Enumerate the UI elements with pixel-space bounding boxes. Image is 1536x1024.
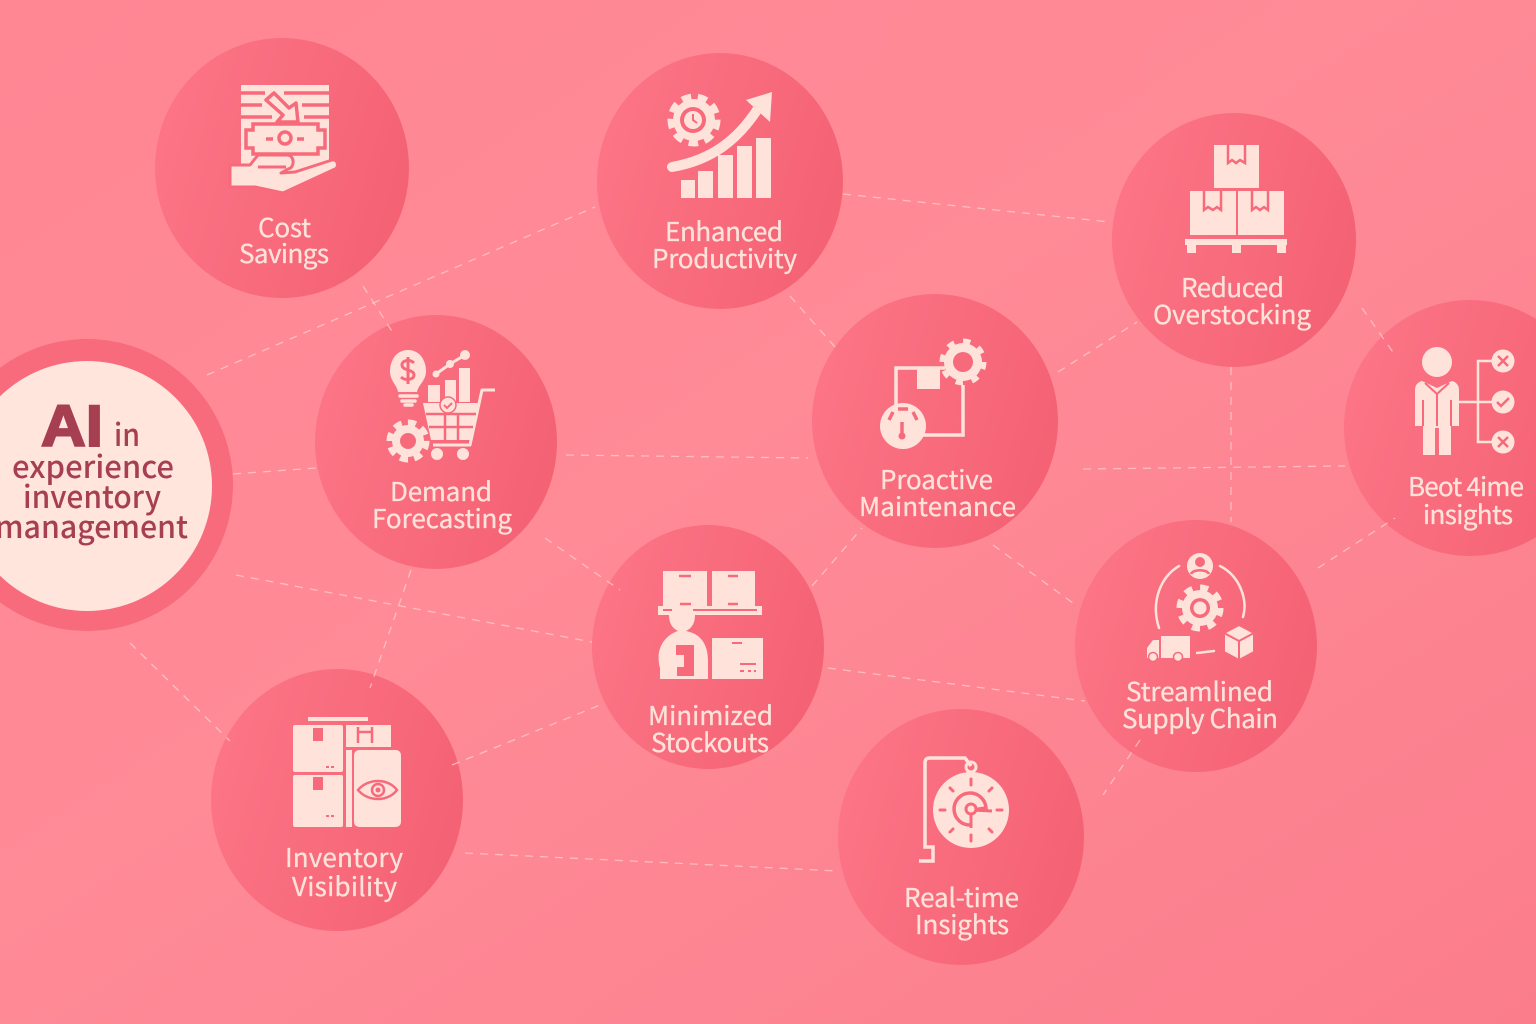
label: Insights <box>915 905 1009 942</box>
panel: cost savings <box>155 38 409 298</box>
central hub: AI in experience inventory management: experience <box>12 442 174 487</box>
icon: bulb, chart, cart and gear <box>390 350 495 460</box>
icon: gear, growth arrow and bars <box>672 92 772 198</box>
label: Cost <box>258 208 311 245</box>
icon: stacked boxes on pallet <box>1185 145 1287 253</box>
label: Minimized <box>648 696 773 733</box>
icon: gauge, box and gear flow <box>880 342 983 449</box>
central hub: AI in experience inventory management: management <box>0 502 188 547</box>
label <box>239 208 329 271</box>
central hub: AI in experience inventory management: in <box>114 410 140 455</box>
panel: best-time insights (garbled "Beot 4ime") <box>1344 300 1536 556</box>
label <box>1122 672 1278 736</box>
label <box>652 212 797 276</box>
panel: enhanced productivity <box>597 53 843 309</box>
label <box>285 838 403 904</box>
label <box>859 460 1016 524</box>
label: Forecasting <box>372 499 512 536</box>
label: insights <box>1423 495 1513 532</box>
label: Demand <box>390 472 492 509</box>
label: Savings <box>239 234 329 271</box>
icon: boxes and tag with eye <box>293 717 401 827</box>
dashed connector lines <box>130 194 1395 871</box>
label <box>648 696 773 760</box>
label: Inventory <box>285 838 403 875</box>
panel: real-time insights <box>838 709 1084 965</box>
label: Real-time <box>904 878 1019 915</box>
central hub: AI in experience inventory management: AI <box>41 394 103 459</box>
icon: worker under shelf of boxes <box>658 571 763 679</box>
label: Visibility <box>292 867 397 904</box>
panel: minimized stockouts <box>592 525 824 769</box>
label: Reduced <box>1181 268 1284 305</box>
label: Streamlined <box>1126 672 1273 709</box>
icon: person with decision options <box>1415 347 1514 455</box>
panel: demand forecasting <box>315 315 557 569</box>
icon: supply chain cycle <box>1147 553 1254 662</box>
label: Productivity <box>652 239 797 276</box>
panel: inventory visibility <box>211 669 463 931</box>
label: Proactive <box>880 460 993 497</box>
label: Enhanced <box>665 212 783 249</box>
panel: streamlined supply chain <box>1075 520 1317 772</box>
icon: money hand document <box>230 85 337 193</box>
label <box>372 472 512 536</box>
label <box>1153 268 1311 332</box>
label: Maintenance <box>859 487 1016 524</box>
label <box>904 878 1019 942</box>
label: Overstocking <box>1153 295 1311 332</box>
central hub: AI in experience inventory management: inventory <box>23 472 161 517</box>
label: Beot 4ime <box>1408 467 1524 504</box>
icon: hanging stopwatch <box>919 758 1009 861</box>
panel: reduced overstocking <box>1112 113 1356 367</box>
label: Supply Chain <box>1122 699 1278 736</box>
label: Stockouts <box>651 723 769 760</box>
panel: proactive maintenance <box>812 294 1058 548</box>
label <box>1408 467 1524 532</box>
central hub: AI in experience inventory management <box>0 339 233 631</box>
